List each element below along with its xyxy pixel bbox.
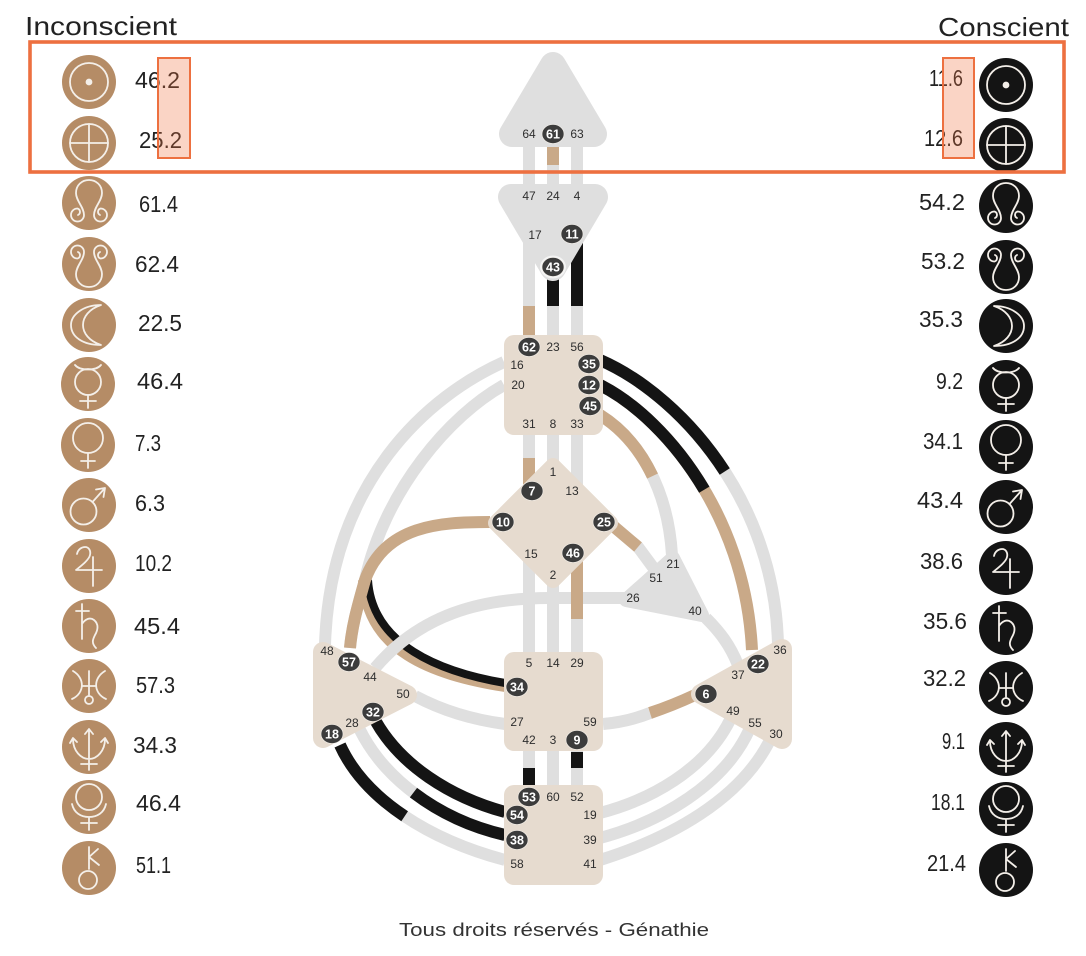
center: throat square: 45 (583, 400, 597, 414)
center: sacral square (504, 652, 603, 751)
center: ajna triangle: 43 (546, 260, 560, 274)
planet: south node (979, 240, 1033, 294)
center: ajna triangle (511, 189, 595, 278)
column: Conscient values: 9.2 (936, 368, 963, 394)
planet: chiron (62, 841, 116, 895)
column: Conscient values: 54.2 (919, 189, 965, 215)
center: head triangle: 64 (522, 127, 536, 141)
heading: Conscient: Conscient (938, 12, 1070, 42)
center: spleen triangle: 18 (325, 728, 339, 742)
center: sacral square: 29 (570, 656, 584, 670)
center: solar plexus triangle: 55 (748, 716, 762, 730)
column: Conscient values: 9.1 (942, 728, 965, 754)
center: throat square: 31 (522, 417, 536, 431)
planet: mars (62, 478, 116, 532)
planet: moon (979, 299, 1033, 353)
center: spleen triangle: 48 (320, 644, 334, 658)
center: spleen triangle (320, 644, 410, 744)
column: Inconscient values: 45.4 (134, 613, 180, 639)
column: Inconscient values: 25.2 (139, 127, 182, 153)
heading: Inconscient: Inconscient (25, 11, 178, 41)
center: root square: 52 (570, 790, 584, 804)
planet: venus (979, 420, 1033, 474)
center: root square: 60 (546, 790, 560, 804)
planet: moon (62, 298, 116, 352)
center: throat square: 35 (582, 358, 596, 372)
center: solar plexus triangle: 6 (703, 688, 710, 702)
center: head triangle: 63 (570, 127, 584, 141)
highlight: right decimal column (943, 58, 974, 158)
center: spleen triangle: 28 (345, 716, 359, 730)
planet: pluto (979, 782, 1033, 836)
center: G diamond: 13 (565, 484, 579, 498)
center: sacral square: 14 (546, 656, 560, 670)
column: Inconscient values: 34.3 (133, 732, 177, 758)
column: Conscient values: 38.6 (920, 548, 963, 574)
planet: neptune (979, 722, 1033, 776)
highlight: top orange frame (30, 42, 1064, 172)
center: ego triangle: 51 (649, 571, 663, 585)
column: Inconscient values: 22.5 (138, 310, 182, 336)
planet: mars (979, 480, 1033, 534)
column: Inconscient values: 61.4 (139, 191, 178, 217)
center: ego triangle: 40 (688, 604, 702, 618)
column: Inconscient values (133, 67, 183, 878)
planet: saturn (62, 599, 116, 653)
planet: mercury (979, 360, 1033, 414)
column: Conscient values (917, 65, 967, 876)
center: sacral square: 42 (522, 733, 536, 747)
center: ajna triangle: 17 (528, 228, 542, 242)
planet: chiron (979, 843, 1033, 897)
center: G diamond: 46 (566, 546, 580, 560)
center: throat square: 8 (550, 417, 557, 431)
column: Conscient values: 18.1 (931, 789, 965, 815)
center: sacral square: 3 (550, 733, 557, 747)
center: throat square: 23 (546, 340, 560, 354)
center: sacral square: 5 (526, 656, 533, 670)
center: root square: 54 (510, 808, 524, 822)
center: root square: 38 (510, 834, 524, 848)
planet: pluto (62, 780, 116, 834)
highlight: left decimal column (158, 58, 190, 158)
column: Inconscient planets (61, 55, 116, 895)
planet: saturn (979, 601, 1033, 655)
column: Inconscient values: 46.4 (137, 368, 183, 394)
center: ego triangle: 26 (626, 591, 640, 605)
center: spleen triangle: 44 (363, 670, 377, 684)
column: Conscient values: 53.2 (921, 248, 965, 274)
center: root square (504, 785, 603, 885)
center: spleen triangle: 50 (396, 687, 410, 701)
center: spleen triangle: 57 (342, 656, 356, 670)
column: Conscient values: 21.4 (927, 850, 966, 876)
planet: south node (62, 237, 116, 291)
footer credit: Tous droits réservés - Génathie (399, 920, 709, 940)
channel: 10-57 tan (350, 522, 490, 648)
center: throat square (504, 335, 603, 435)
center: solar plexus triangle: 37 (731, 668, 745, 682)
channel: 44-26 gray (375, 598, 630, 668)
center: root square: 53 (522, 790, 536, 804)
planet: north node (979, 179, 1033, 233)
center: G diamond (492, 465, 615, 582)
center: throat square: 33 (570, 417, 584, 431)
center: root square: 41 (583, 857, 597, 871)
center: solar plexus triangle: 36 (773, 643, 787, 657)
center: throat square: 12 (582, 378, 596, 392)
center: sacral square: 34 (510, 680, 524, 694)
planet: venus (61, 418, 115, 472)
column: Inconscient values: 62.4 (135, 251, 179, 277)
channels: vertical columns (529, 146, 577, 785)
column: Inconscient values: 10.2 (135, 550, 172, 576)
center: G diamond: 25 (597, 516, 611, 530)
center: G diamond: 1 (550, 465, 557, 479)
center: ajna triangle: 47 (522, 189, 536, 203)
center: ajna triangle: 11 (565, 228, 579, 242)
planet: sun (979, 58, 1033, 112)
center: solar plexus triangle: 49 (726, 704, 740, 718)
planet: uranus (979, 661, 1033, 715)
bodygraph chart (320, 65, 787, 885)
center: sacral square: 59 (583, 715, 597, 729)
center: solar plexus triangle (695, 643, 787, 741)
planet: uranus (62, 659, 116, 713)
column: Inconscient values: 51.1 (136, 852, 171, 878)
center: G diamond: 7 (529, 484, 536, 498)
center: ego triangle (626, 557, 702, 618)
planet: jupiter (62, 539, 116, 593)
planet: neptune (62, 720, 116, 774)
planet: earth (62, 116, 116, 170)
center: throat square: 56 (570, 340, 584, 354)
channels: coloured arc segments (340, 360, 778, 860)
column: Conscient planets (979, 58, 1033, 897)
center: sacral square: 27 (510, 715, 524, 729)
center: throat square: 16 (510, 358, 524, 372)
center: head triangle (512, 65, 594, 144)
column: Inconscient values: 46.2 (135, 67, 180, 93)
column: Inconscient values: 7.3 (135, 430, 161, 456)
planet: north node (62, 176, 116, 230)
center: head triangle: 61 (546, 128, 560, 142)
center: solar plexus triangle: 22 (751, 658, 765, 672)
center: solar plexus triangle: 30 (769, 727, 783, 741)
column: Conscient values: 34.1 (923, 428, 963, 454)
column: Conscient values: 12.6 (924, 125, 963, 151)
center: G diamond: 10 (496, 516, 510, 530)
planet: earth (979, 118, 1033, 172)
center: root square: 58 (510, 857, 524, 871)
center: throat square: 20 (511, 378, 525, 392)
center: root square: 39 (583, 833, 597, 847)
column: Conscient values: 35.3 (919, 306, 963, 332)
center: ego triangle: 21 (666, 557, 680, 571)
center: sacral square: 9 (574, 734, 581, 748)
center: G diamond: 15 (524, 547, 538, 561)
planet: jupiter (979, 541, 1033, 595)
column: Conscient values: 43.4 (917, 487, 963, 513)
channels: gray arcs (325, 360, 778, 860)
channel: 34-10 tan and black (364, 580, 505, 686)
planet: sun (62, 55, 116, 109)
column: Conscient values: 11.6 (929, 65, 963, 91)
column: Conscient values: 32.2 (923, 665, 966, 691)
column: Inconscient values: 57.3 (136, 672, 175, 698)
column: Conscient values: 35.6 (923, 608, 967, 634)
center: throat square: 62 (522, 340, 536, 354)
center: spleen triangle: 32 (366, 706, 380, 720)
center: G diamond: 2 (550, 568, 557, 582)
center: root square: 19 (583, 808, 597, 822)
center: ajna triangle: 24 (546, 189, 560, 203)
planet: mercury (61, 357, 115, 411)
column: Inconscient values: 46.4 (136, 790, 181, 816)
center: ajna triangle: 4 (574, 189, 581, 203)
column: Inconscient values: 6.3 (135, 490, 165, 516)
